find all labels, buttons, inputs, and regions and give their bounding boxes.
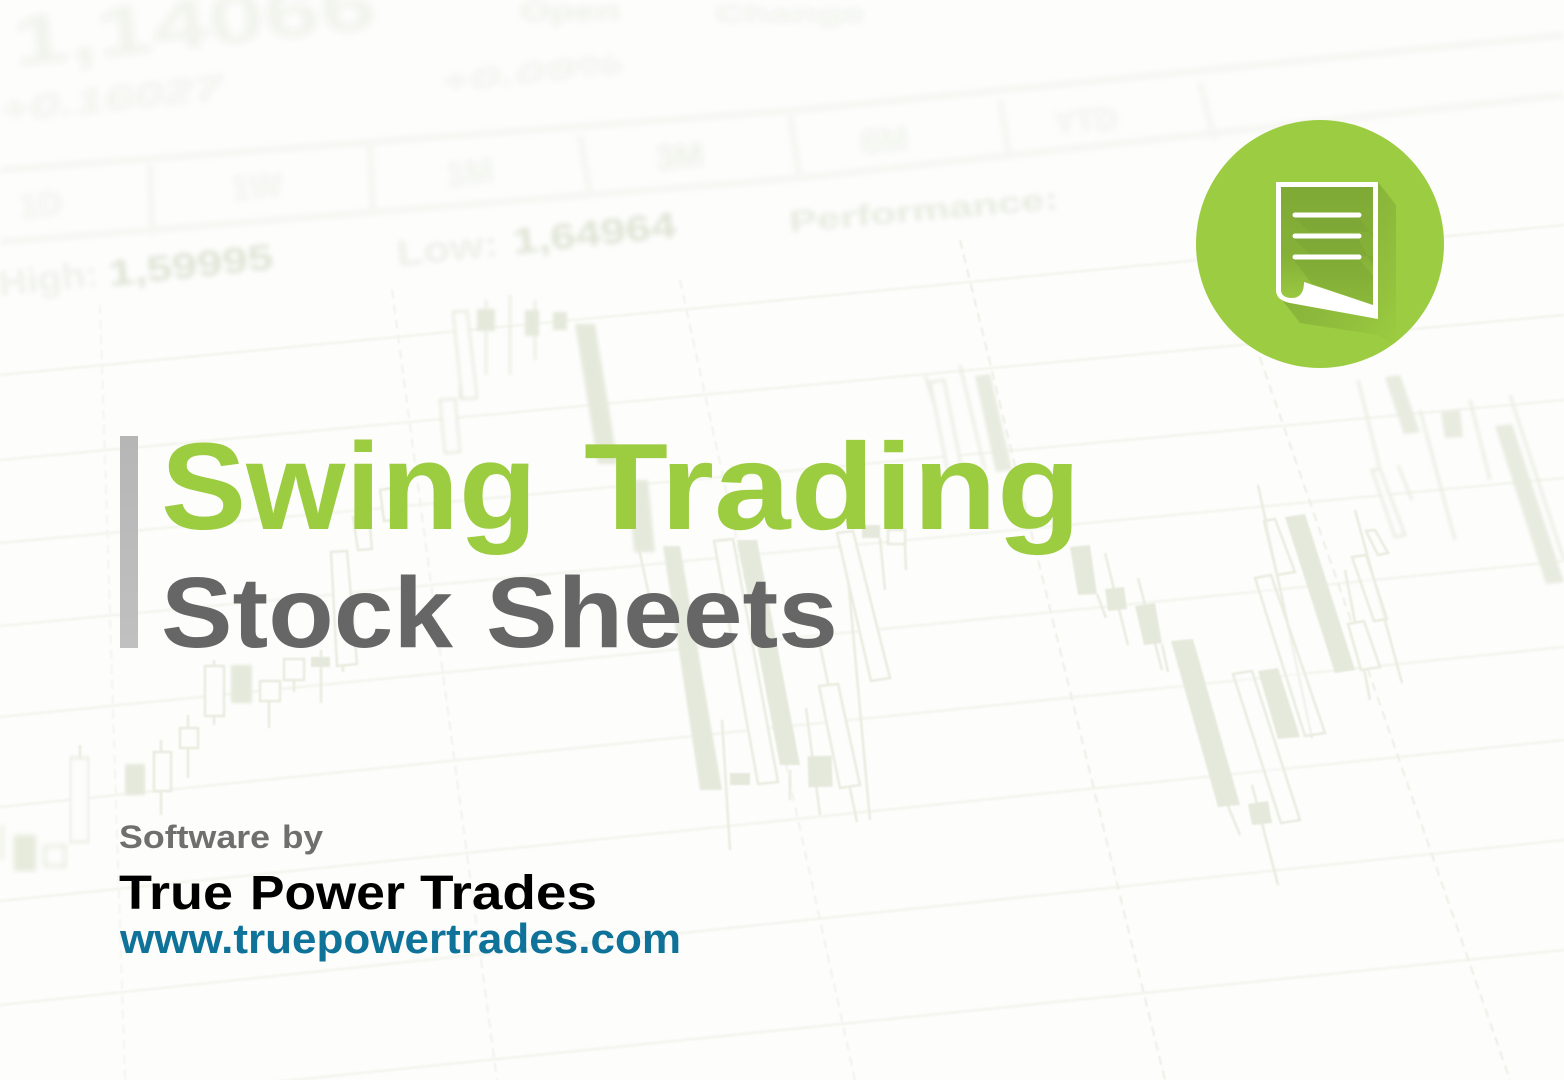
blurred high and low labels [0,183,1060,304]
chart grid lines [0,225,1564,1080]
blurred market data text: 3M [654,136,705,178]
blurred market data text: YTD [1052,101,1119,142]
icon: text lines [1292,212,1362,260]
icon: line shadows [1293,217,1373,305]
blurred market data text: +0.16027 [0,68,228,130]
blurred market data text: +0.09% [437,48,625,98]
candlesticks beside title [806,525,906,822]
blurred high and low labels: 1,64964 [511,204,678,262]
icon: paper sheet [1276,182,1378,319]
blurred market data text: 6M [859,120,910,162]
blurred upper right candlesticks [925,365,1564,584]
company name: Power [250,867,405,920]
credit: software by: by [282,819,323,855]
subtitle: Stock Sheets: Sheets [486,557,838,669]
subtitle: Stock Sheets: Stock [161,557,453,669]
blurred high and low labels: Performance: [788,183,1060,239]
icon: document in green circle [1196,120,1444,368]
blurred bottom-left candles [2,825,65,871]
right candlesticks [1070,485,1402,885]
blurred market data text: 1D [17,184,64,226]
website url: www.truepowertrades.com [119,915,681,962]
company name: True [119,867,233,920]
icon: long shadow [1276,182,1396,345]
title: Swing Trading: Trading [584,419,1081,556]
title: Swing Trading: Swing [161,419,537,556]
blurred market data text: 1M [444,152,495,194]
icon: green circle [1196,120,1444,368]
left candlesticks [70,488,395,842]
icon: inner paper panel [1281,187,1373,305]
central candlesticks [575,324,800,850]
credit: software by: Software [119,819,270,855]
title accent bar [120,436,138,648]
blurred upper-left candlesticks [440,295,567,453]
blurred market data text [0,0,1119,226]
blurred high and low labels: 1,59995 [107,236,275,294]
company name: Trades [420,867,597,920]
blurred header band with period tabs [0,35,1564,242]
blurred market data text: Change [715,1,865,28]
blurred high and low labels: Low: [395,223,500,274]
blurred market data text: 1W [229,166,284,208]
